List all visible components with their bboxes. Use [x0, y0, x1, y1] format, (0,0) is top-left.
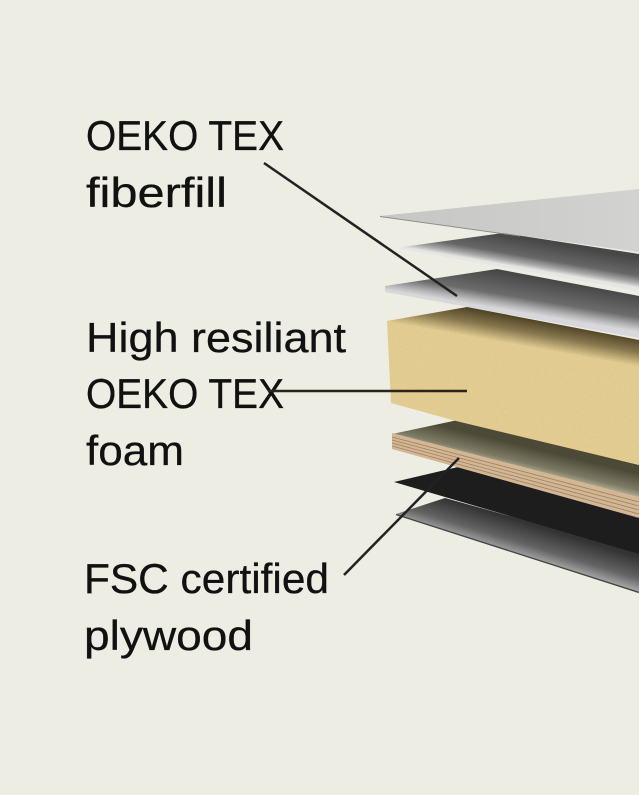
label: FSC certified plywood: FSC certified [84, 555, 329, 602]
label: High resiliant OEKO TEX foam [86, 314, 346, 474]
layer: black sheet [394, 467, 639, 554]
leader line: fiberfill [264, 163, 457, 296]
label: High resiliant OEKO TEX foam: OEKO TEX [86, 370, 284, 417]
layer: fiberfill sheet 3 [385, 269, 639, 338]
layer: fiberfill sheet 2 [395, 233, 639, 291]
layer: foam block [387, 307, 639, 465]
layered mattress illustration [380, 189, 639, 592]
leader line: plywood [344, 458, 459, 575]
label: High resiliant OEKO TEX foam: High resiliant [86, 314, 346, 361]
layer: bottom grey sheet [396, 498, 639, 592]
layer: plywood board [392, 420, 639, 518]
label: FSC certified plywood: plywood [84, 612, 253, 659]
label: OEKO TEX fiberfill: OEKO TEX [86, 112, 284, 159]
label: High resiliant OEKO TEX foam: foam [86, 427, 184, 474]
layer: top grey sheet [380, 189, 639, 252]
leader line: foam [268, 390, 467, 392]
label: FSC certified plywood [84, 555, 329, 659]
label: OEKO TEX fiberfill [86, 112, 284, 216]
label: OEKO TEX fiberfill: fiberfill [86, 169, 227, 216]
